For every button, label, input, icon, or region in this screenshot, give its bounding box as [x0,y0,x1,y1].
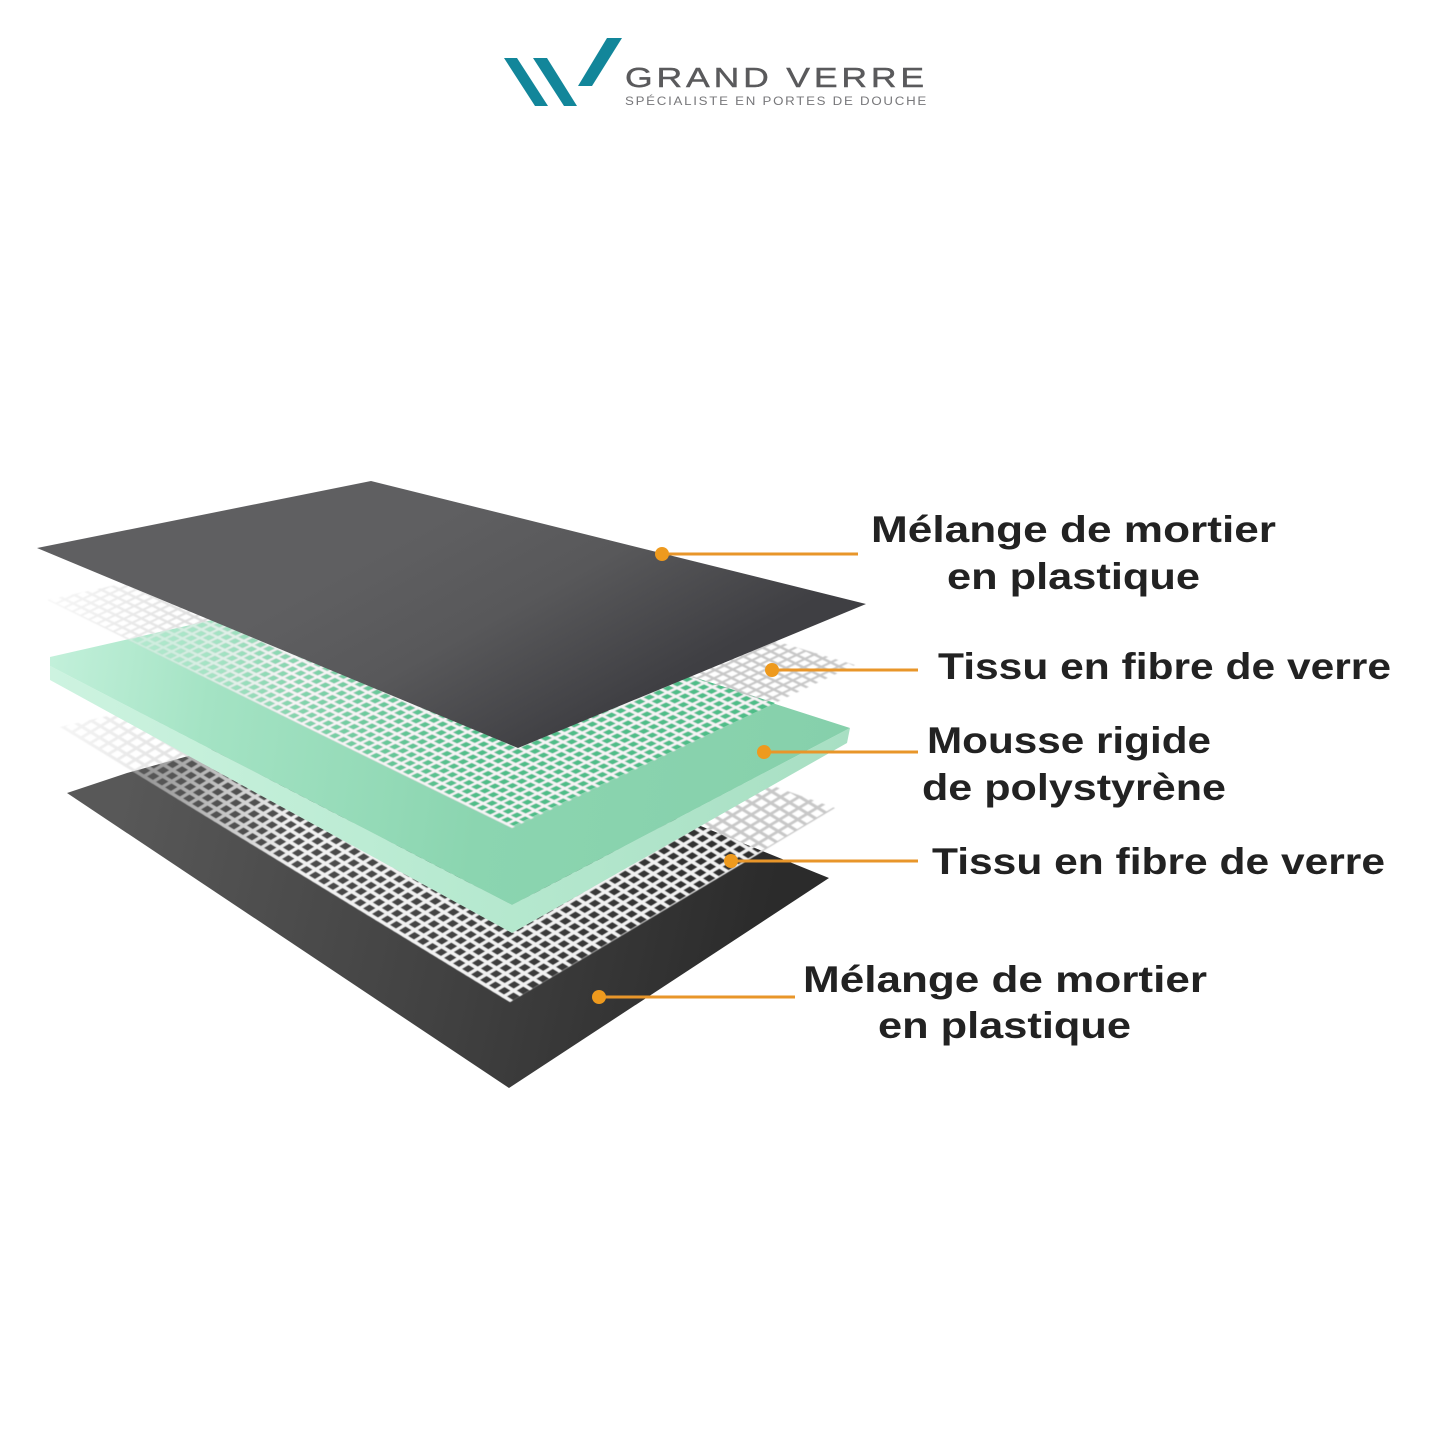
callout: top mortar [655,509,1276,597]
infographic canvas [37,38,1390,1088]
callout: foam [757,720,1226,808]
label: Mousse rigide [927,720,1211,761]
callout: bottom mortar [592,959,1207,1046]
layer: lower fibreglass mesh [62,716,835,1003]
callout: upper mesh [765,646,1391,687]
callout: lower mesh [724,841,1385,882]
leader line [592,990,795,1004]
leader line [655,547,858,561]
brand name: GRAND VERRE [625,62,928,93]
label: Tissu en fibre de verre [932,841,1385,882]
tagline: SPÉCIALISTE EN PORTES DE DOUCHE [625,95,928,108]
leader line [757,745,918,759]
layer: bottom mortar sheet [67,700,829,1088]
label: en plastique [878,1005,1131,1046]
layer: upper fibreglass mesh [56,585,855,828]
label: de polystyrène [922,767,1226,808]
label: Mélange de mortier [803,959,1207,1000]
layered panel diagram [37,481,866,1088]
label: en plastique [947,556,1200,597]
logo [504,38,928,108]
layer: polystyrene foam [50,580,850,933]
layer: top mortar sheet [37,481,866,748]
logo mark [504,38,622,106]
leader line [724,854,918,868]
label: Mélange de mortier [871,509,1276,550]
label: Tissu en fibre de verre [938,646,1391,687]
leader line [765,663,918,677]
